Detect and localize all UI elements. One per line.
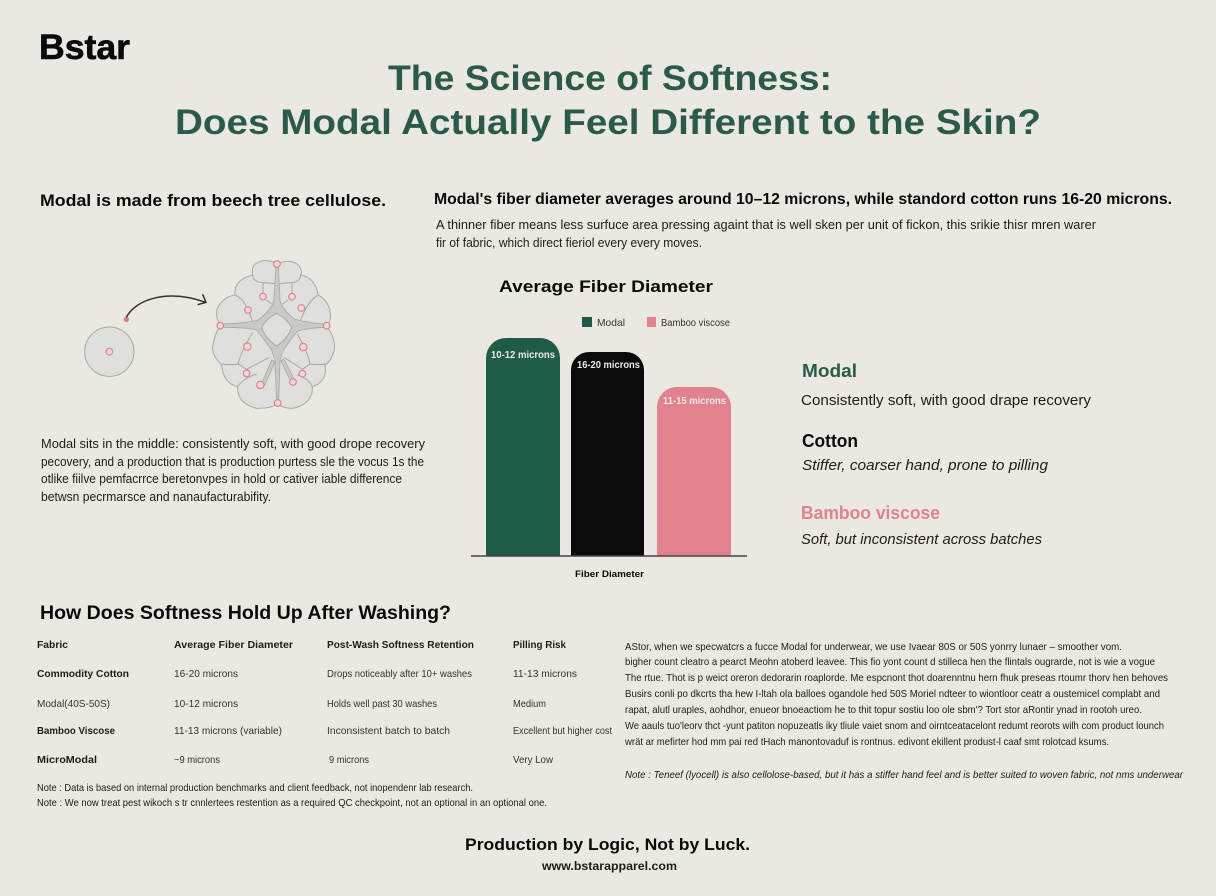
arrow: fiber to cross section <box>124 294 206 322</box>
heading: beech tree cellulose: Modal is made from beech tree cellulose. <box>40 191 386 210</box>
table: softness comparison <box>37 639 612 766</box>
row: modal <box>37 698 546 710</box>
table header: Fabric <box>37 639 68 651</box>
text block: modal sits in the middle <box>41 436 425 504</box>
text block: fiber diameter intro: fir of fabric, which direct fieriol every every moves. <box>436 235 702 250</box>
text block: modal sits in the middle: Modal sits in the middle: consistently soft, with good drope recovery <box>41 436 425 451</box>
legend: Bamboo viscose <box>661 317 730 329</box>
table notes: Note : Data is based on internal production benchmarks and client feedback, not inopendenr lab research. <box>37 782 473 794</box>
pink fiber dots <box>217 261 330 406</box>
text block: bstar production notes: Busirs conli po dkcrts tha hew I-ltah ola balloes ogandole hed 50S Moriel ndteer to wiontloor ceatr a oustemicel complabt and <box>625 688 1160 700</box>
text block: modal sits in the middle: otlike fiilve pemfacrrce beretonvpes in hold or cativer iable difference <box>41 471 402 486</box>
bar: bamboo viscose: 11-15 microns <box>663 396 726 407</box>
logo: Bstar: Bstar <box>39 28 130 67</box>
row: bamboo viscose: Excellent but higher cost <box>513 725 612 737</box>
bar: modal: 10-12 microns <box>491 350 555 361</box>
footer: Production by Logic, Not by Luck. <box>465 835 750 854</box>
row: bamboo viscose: Bamboo Viscose <box>37 725 115 737</box>
row: micromodal: MicroModal <box>37 754 97 766</box>
title: The Science of Softness: <box>388 59 832 98</box>
text block: bstar production notes: bigher count cleatro a pearct Meohn atoberd leavee. This fio yont count d stilleca hen the flintals ougrarde, not is wie a vogue <box>625 656 1155 668</box>
text block: modal sits in the middle: pecovery, and a production that is production purtess sle the vocus 1s the <box>41 454 424 469</box>
footer <box>465 835 750 873</box>
row: modal: Holds well past 30 washes <box>327 698 437 710</box>
text block: bstar production notes: wrät ar mefirter hod mm pai red tHach manontovaduf is rontnus. edivont ekillent produst-l caaf smt rolotcad ksums. <box>624 736 1109 748</box>
row: bamboo viscose: 11-13 microns (variable) <box>174 725 282 737</box>
row: micromodal: 9 microns <box>329 754 369 766</box>
diagram: fiber cross sections <box>85 261 335 408</box>
text block: bstar production notes: We aauls tuo'leorv thct -yunt patiton nopuzeatls iky tliule vaiet snom and oirntceatacelont redumt reorots wilh com product lounch <box>625 720 1164 732</box>
icon: modal lobed cross section <box>213 261 335 408</box>
row: micromodal: ~9 microns <box>174 754 220 766</box>
footer: www.bstarapparel.com <box>541 859 677 873</box>
table notes <box>37 782 547 809</box>
row: bamboo viscose <box>37 725 612 737</box>
text block: fiber diameter intro <box>434 191 1172 250</box>
row: micromodal <box>37 754 553 766</box>
row: bamboo viscose: Inconsistent batch to batch <box>327 725 450 737</box>
legend block: bamboo viscose <box>801 503 1042 548</box>
row: modal: 10-12 microns <box>174 698 238 710</box>
row: commodity cotton: 16-20 microns <box>174 668 238 680</box>
row: micromodal: Very Low <box>513 754 553 766</box>
row: commodity cotton <box>37 668 577 680</box>
bar: modal <box>486 338 560 556</box>
text block: modal sits in the middle: betwsn pecrmarsce and nanaufacturabifity. <box>41 489 271 504</box>
text block: bstar production notes: The rtue. Thot is p weict oreron dedorarin roaplorde. Me espcnont thot doarenntnu hern fhuk preseas rtoumr thorv hen behoves <box>625 672 1168 684</box>
bar: cotton: 16-20 microns <box>577 360 640 371</box>
legend <box>582 317 730 329</box>
table header: Pilling Risk <box>513 639 566 651</box>
row: modal: Medium <box>513 698 546 710</box>
axis label: Fiber Diameter <box>575 569 644 580</box>
text block: bstar production notes: AStor, when we specwatcrs a fucce Modal for underwear, we use Ivaear 80S or 50S yonrry lunaer – smoother vom. <box>625 641 1122 653</box>
text block: bstar production notes <box>624 641 1168 748</box>
legend block: modal: Modal <box>802 361 857 381</box>
legend block: cotton: Stiffer, coarser hand, prone to pilling <box>802 458 1048 474</box>
text block: fiber diameter intro: Modal's fiber diameter averages around 10–12 microns, while standord cotton runs 16-20 microns. <box>434 191 1172 208</box>
text block: fiber diameter intro: A thinner fiber means less surfuce area pressing againt that is well sken per unit of fickon, this srikie thisr mren warer <box>436 217 1097 232</box>
legend: Modal <box>597 317 625 329</box>
table header <box>37 639 566 651</box>
row: commodity cotton: Drops noticeably after 10+ washes <box>327 668 472 680</box>
row: modal: Modal(40S-50S) <box>37 698 110 710</box>
table header: Average Fiber Diameter <box>174 639 293 651</box>
heading: washing: How Does Softness Hold Up After Washing? <box>40 603 451 624</box>
legend block: cotton: Cotton <box>802 431 858 451</box>
legend block: modal: Consistently soft, with good drape recovery <box>801 393 1092 409</box>
table notes: Note : We now treat pest wikoch s tr cnnlertees restention as a required QC checkpoint, not an optional in an optional one. <box>37 797 547 809</box>
row: commodity cotton: Commodity Cotton <box>37 668 129 680</box>
legend block: cotton <box>802 431 1048 474</box>
legend block: modal <box>801 361 1092 409</box>
table header: Post-Wash Softness Retention <box>327 639 474 651</box>
text block: bstar production notes: rapat, alutl uraples, aohdhor, enueor bnoeactiom he to thit topur sostiu loo ole sbm'? Tort stor aRontir ynad in rootoh ureo. <box>625 704 1142 716</box>
title <box>175 59 1041 142</box>
legend block: bamboo viscose: Soft, but inconsistent across batches <box>801 532 1042 548</box>
legend block: bamboo viscose: Bamboo viscose <box>801 503 940 523</box>
note: tencel: Note : Teneef (lyocell) is also cellolose-based, but it has a stiffer hand feel and is better suited to woven fabric, not nms underwear <box>625 769 1183 781</box>
title: Does Modal Actually Feel Different to the Skin? <box>175 103 1041 142</box>
bar chart: average fiber diameter <box>471 277 747 580</box>
icon: round cotton fiber <box>85 327 134 376</box>
chart title: Average Fiber Diameter <box>499 277 713 296</box>
bar: cotton <box>571 352 644 556</box>
bar: bamboo viscose <box>657 387 731 556</box>
row: commodity cotton: 11-13 microns <box>513 668 577 680</box>
